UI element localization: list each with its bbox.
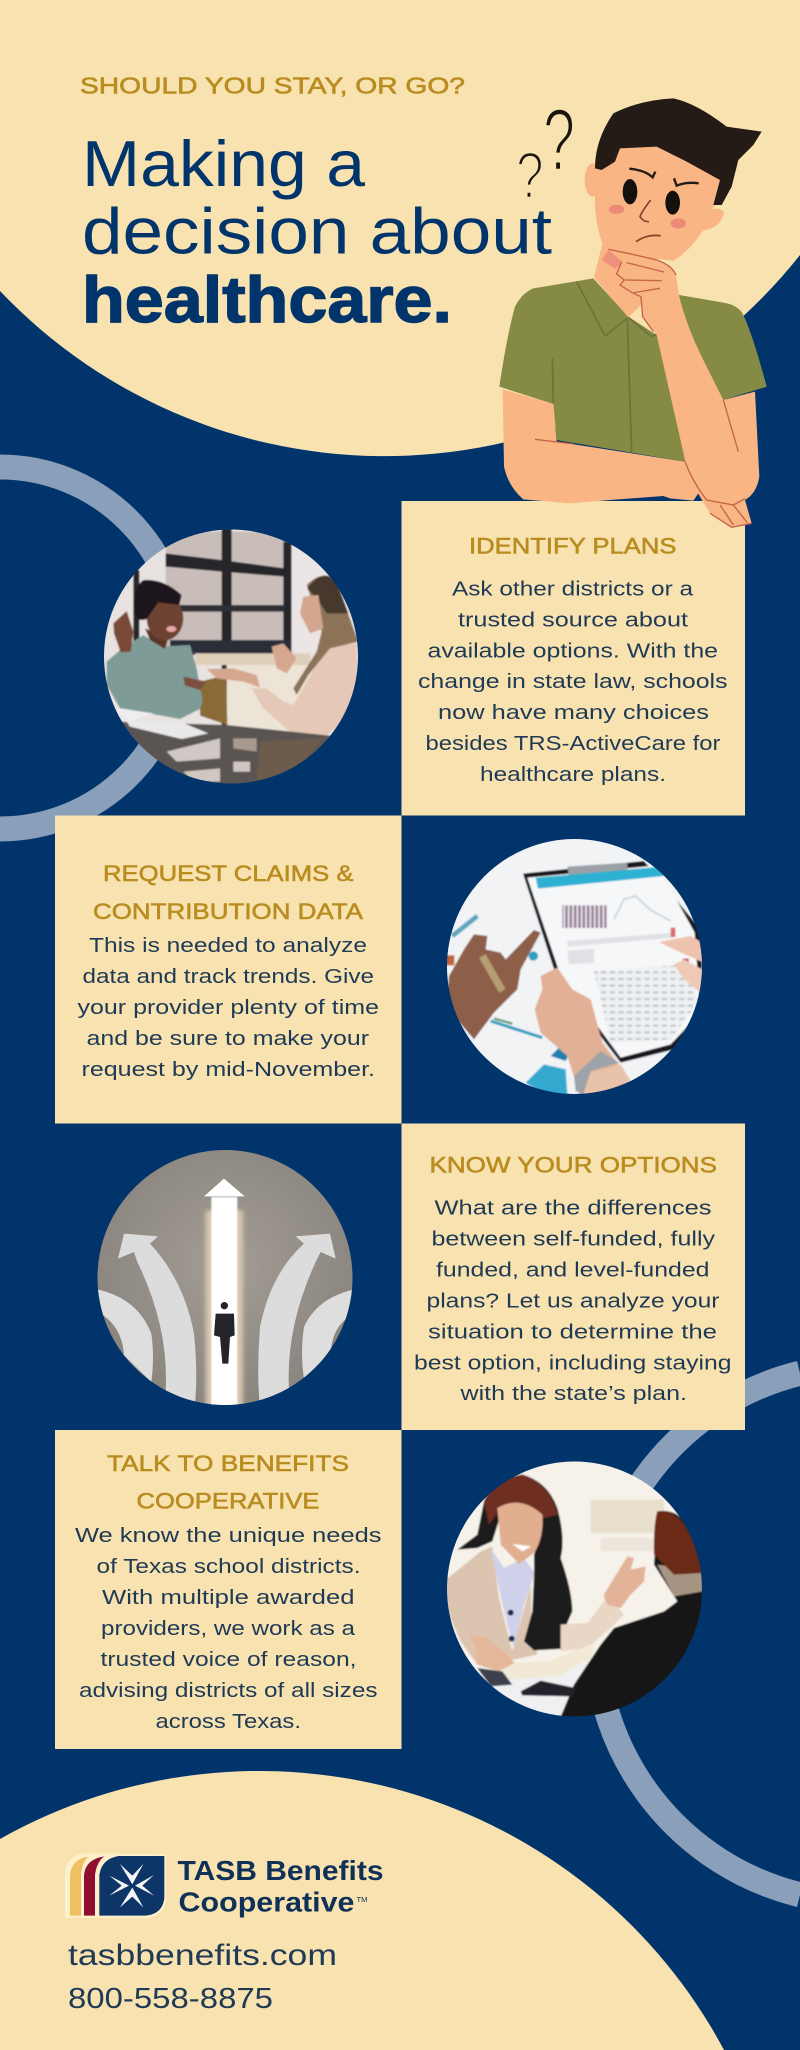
body text: available options. With the — [428, 640, 718, 662]
head — [585, 98, 762, 261]
panel: talk to benefits cooperative — [55, 1430, 402, 1749]
body text: This is needed to analyze — [89, 935, 367, 957]
face — [595, 145, 722, 261]
body text — [75, 1525, 382, 1733]
photo: two women talking in an office — [104, 530, 358, 784]
body text — [78, 935, 379, 1081]
panel background — [402, 1124, 745, 1430]
hair — [595, 98, 762, 205]
heading — [107, 1451, 349, 1514]
footer logo — [65, 1853, 383, 1918]
heading: IDENTIFY PLANS — [469, 534, 676, 558]
body text: between self-funded, fully — [432, 1228, 715, 1250]
background: top cream shape — [0, 0, 800, 456]
neck shadow — [602, 250, 625, 268]
heading: REQUEST CLAIMS & — [103, 861, 354, 886]
photo: hands reviewing a clipboard — [447, 839, 702, 1094]
decorative ring: lower right — [595, 1373, 800, 1895]
cheeks — [609, 205, 624, 214]
logo wordmark: TASB Benefits — [178, 1855, 384, 1886]
left ear — [585, 163, 601, 197]
panel background — [55, 816, 402, 1124]
body text: besides TRS-ActiveCare for — [426, 733, 721, 755]
photo: businesswoman advising a client — [447, 1462, 702, 1716]
illustration: thinking man — [499, 91, 767, 527]
decorative ring: left — [0, 467, 181, 829]
panel: identify plans — [402, 501, 745, 816]
nose and mouth — [636, 200, 661, 242]
body text: your provider plenty of time — [78, 997, 379, 1019]
collar and placket — [552, 282, 657, 452]
icon: question marks: ? — [516, 139, 544, 213]
body text: Ask other districts or a — [452, 578, 694, 600]
heading — [93, 861, 363, 924]
body text: plans? Let us analyze your — [426, 1290, 720, 1312]
arms — [503, 249, 759, 527]
logo wordmark: Cooperative — [178, 1886, 354, 1918]
panel: request claims — [55, 816, 402, 1124]
body text — [418, 578, 728, 786]
website: tasbbenefits.com — [68, 1939, 337, 1972]
body text: funded, and level-funded — [436, 1260, 710, 1282]
title: Making a — [82, 127, 366, 200]
body text — [414, 1198, 732, 1405]
body text: trusted voice of reason, — [100, 1649, 356, 1671]
neck — [594, 240, 663, 317]
body text: trusted source about — [458, 610, 689, 632]
body text: advising districts of all sizes — [79, 1680, 378, 1702]
body text: We know the unique needs — [75, 1525, 382, 1547]
eyes — [623, 179, 637, 204]
body text: What are the differences — [434, 1198, 712, 1220]
body text: with the state’s plan. — [459, 1383, 687, 1405]
body text: data and track trends. Give — [82, 966, 374, 988]
skin creases — [535, 249, 752, 527]
body text: across Texas. — [156, 1711, 301, 1733]
body text: best option, including staying — [414, 1352, 732, 1374]
body text: change in state law, schools — [418, 671, 728, 693]
panel background — [402, 501, 745, 816]
phone number: 800-558-8875 — [68, 1983, 273, 2015]
body text: healthcare plans. — [480, 764, 666, 786]
background: bottom cream shape — [0, 1771, 724, 2050]
panel: know your options — [402, 1124, 745, 1430]
eyebrow heading: SHOULD YOU STAY, OR GO? — [80, 72, 465, 98]
forearm and hand — [608, 249, 759, 527]
logo wordmark — [178, 1855, 384, 1918]
title: decision about — [82, 194, 552, 268]
right ear — [703, 209, 724, 231]
title: healthcare. — [82, 263, 452, 336]
body — [499, 240, 767, 462]
heading: KNOW YOUR OPTIONS — [430, 1152, 717, 1178]
body text: and be sure to make your — [86, 1028, 369, 1050]
heading: COOPERATIVE — [136, 1488, 320, 1514]
icon: question marks — [516, 91, 575, 213]
logo wordmark: TM — [356, 1897, 368, 1904]
shirt — [499, 278, 767, 462]
title — [82, 127, 552, 336]
body text: With multiple awarded — [102, 1587, 354, 1609]
brows — [629, 169, 699, 186]
panel background — [55, 1430, 402, 1749]
photo: man walking toward glowing arrows — [98, 1150, 352, 1405]
heading: CONTRIBUTION DATA — [93, 899, 363, 924]
body text: request by mid-November. — [82, 1059, 375, 1081]
body text: now have many choices — [438, 702, 709, 724]
heading: TALK TO BENEFITS — [107, 1451, 349, 1476]
body text: providers, we work as a — [101, 1618, 356, 1640]
icon: question marks: ? — [543, 91, 575, 189]
body text: situation to determine the — [428, 1322, 717, 1344]
body text: of Texas school districts. — [96, 1556, 360, 1578]
logo mark — [65, 1853, 166, 1918]
folded arm — [503, 389, 698, 503]
